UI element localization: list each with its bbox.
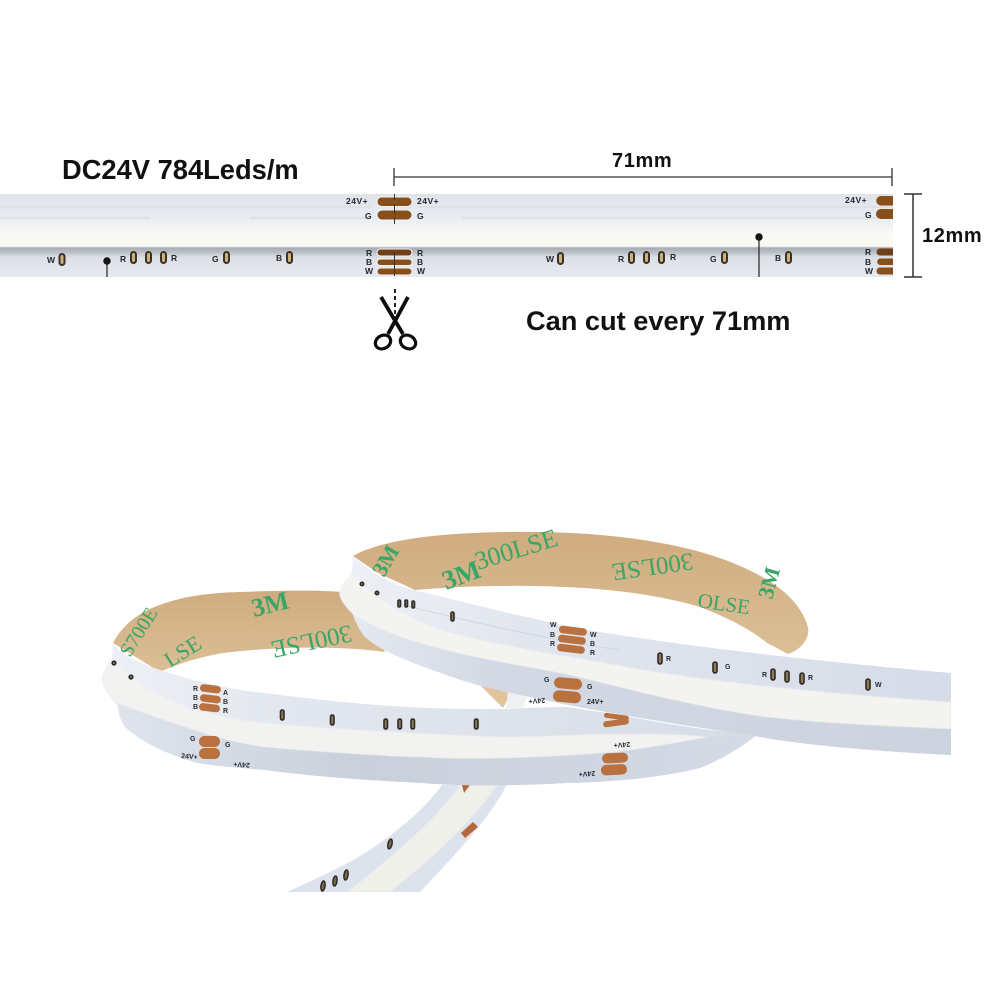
labels on right coil: B — [550, 632, 555, 639]
labels on right coil: W — [550, 622, 557, 629]
strip pad labels: 24V+ — [417, 196, 439, 206]
chips — [360, 582, 870, 690]
callout markers on strip — [103, 233, 763, 277]
caption: can cut every 71mm: Can cut every 71mm — [526, 305, 790, 336]
labels on right coil: R — [550, 641, 555, 648]
labels on right coil — [528, 622, 882, 706]
strip pad labels: B — [366, 257, 372, 267]
strip pad labels: R — [417, 248, 423, 258]
centre cut pads — [377, 197, 412, 275]
labels on right coil: R — [590, 650, 595, 657]
labels on left coil: 24V+ — [181, 753, 198, 761]
right coil adhesive backing: 3M — [367, 540, 404, 580]
tail strip — [287, 785, 507, 892]
labels on left coil: R — [193, 686, 198, 693]
labels on right coil: W — [875, 682, 882, 689]
labels on right coil: W — [590, 632, 597, 639]
right coil adhesive backing: 3M — [753, 564, 785, 601]
strip pad labels: R — [120, 254, 126, 264]
labels on right coil: G — [725, 664, 731, 671]
LED chips — [60, 252, 791, 265]
LED strip: flat top view — [0, 194, 893, 277]
labels on right coil: G — [544, 677, 550, 684]
strip pad labels: G — [417, 211, 424, 221]
right coil adhesive backing: OLSE — [696, 588, 752, 619]
labels on left coil: A — [223, 690, 228, 697]
strip pad labels: R — [171, 253, 177, 263]
dimension: 12mm — [904, 194, 982, 277]
labels on left coil: G — [190, 736, 196, 743]
labels on left coil: G — [225, 742, 231, 749]
labels on left coil: B — [193, 695, 198, 702]
labels on left coil: B — [193, 704, 198, 711]
lower blue band — [352, 613, 951, 755]
icon: scissors — [373, 289, 418, 352]
left coil adhesive backing: 300LSE — [269, 619, 354, 663]
dimension: 71mm: 71mm — [612, 150, 672, 172]
strip pad labels: G — [212, 254, 219, 264]
left coil front band — [102, 643, 757, 785]
strip pad labels: B — [417, 257, 423, 267]
strip pad labels: B — [775, 253, 781, 263]
left coil adhesive backing — [113, 586, 385, 672]
right coil front band — [340, 556, 951, 755]
strip pad labels: 24V+ — [346, 196, 368, 206]
labels on left coil: 24V+ — [578, 769, 595, 777]
white glow band — [102, 658, 707, 758]
chips — [112, 661, 478, 729]
end pads — [876, 196, 893, 274]
pads — [553, 625, 587, 704]
strip pad labels: G — [865, 210, 872, 220]
strip pad labels: G — [365, 211, 372, 221]
right coil adhesive backing — [353, 523, 808, 708]
strip pad labels: W — [865, 266, 874, 276]
strip pad labels: R — [618, 254, 624, 264]
strip pad labels: 24V+ — [845, 195, 867, 205]
labels on left coil: 24V+ — [613, 740, 630, 748]
title: DC24V 784Leds/m: DC24V 784Leds/m — [62, 154, 299, 185]
photo: coiled LED strip — [102, 523, 951, 892]
white glow band — [340, 573, 951, 729]
strip pad labels: W — [47, 255, 56, 265]
labels on right coil: R — [666, 656, 671, 663]
labels on left coil: B — [223, 699, 228, 706]
left coil adhesive backing: S700E — [116, 604, 163, 661]
labels on right coil: R — [762, 672, 767, 679]
left coil adhesive backing: LSE — [159, 630, 206, 672]
strip pad labels: R — [366, 248, 372, 258]
right coil adhesive backing: 300LSE — [610, 547, 695, 585]
strip pad labels: G — [710, 254, 717, 264]
cut line through pads — [394, 194, 396, 276]
strip pad labels: B — [865, 257, 871, 267]
labels on right coil: 24V+ — [587, 699, 604, 706]
strip pad labels: B — [276, 253, 282, 263]
labels on left coil — [181, 686, 630, 777]
labels on left coil: R — [223, 708, 228, 715]
left coil adhesive backing: 3M — [248, 586, 292, 623]
right coil adhesive backing: 3M — [438, 554, 485, 596]
labels on right coil: 24V+ — [528, 696, 545, 704]
strip pad labels: W — [546, 254, 555, 264]
strip pad labels — [47, 195, 874, 276]
strip pad labels: R — [670, 252, 676, 262]
right coil adhesive backing: 300LSE — [471, 523, 561, 576]
dimension: 71mm — [394, 150, 892, 186]
labels on left coil: 24V+ — [233, 760, 250, 768]
strip pad labels: R — [865, 247, 871, 257]
tan sliver under strip — [478, 683, 512, 708]
labels on right coil: R — [808, 675, 813, 682]
labels on right coil: G — [587, 684, 593, 691]
strip pad labels: W — [365, 266, 374, 276]
pads — [199, 684, 629, 776]
lower blue band — [118, 703, 757, 785]
labels on right coil: B — [590, 641, 595, 648]
dimension: 12mm: 12mm — [922, 225, 982, 247]
strip pad labels: W — [417, 266, 426, 276]
